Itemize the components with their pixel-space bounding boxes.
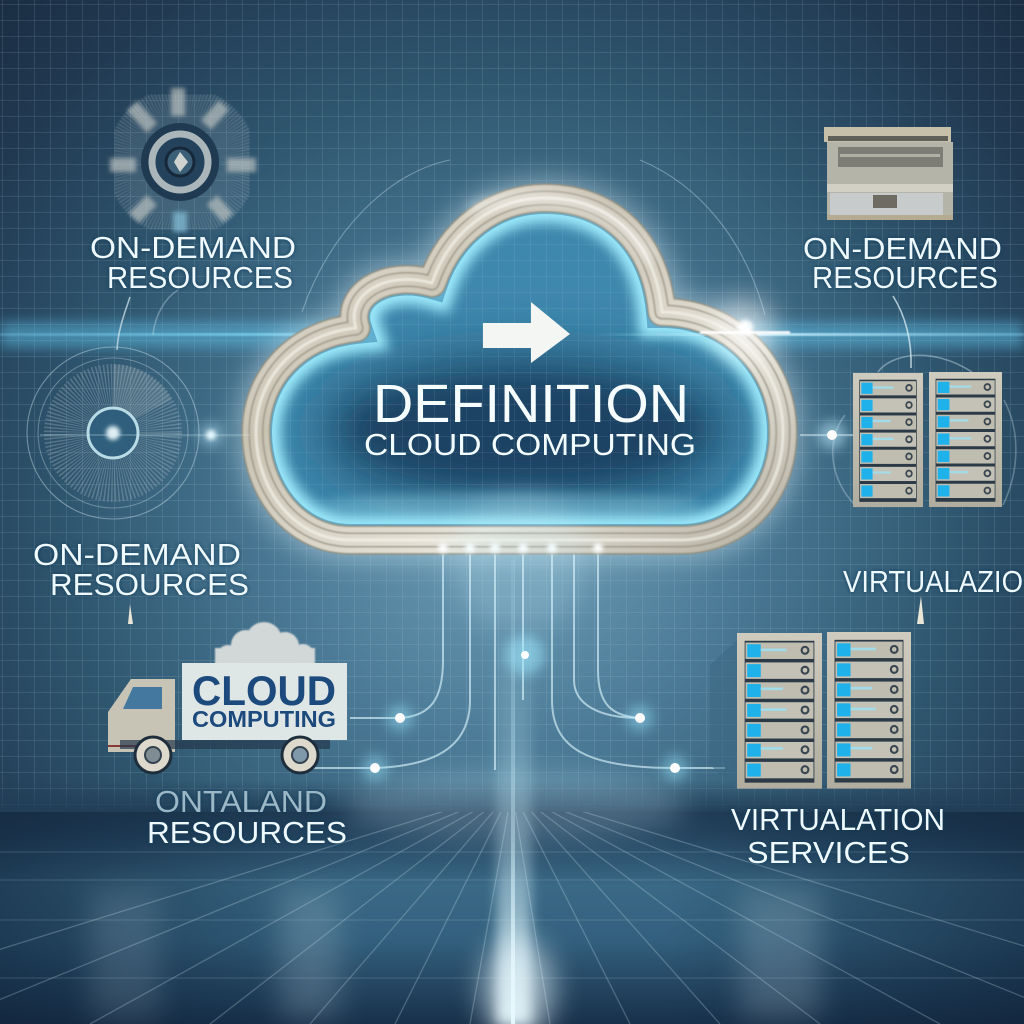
truck cloud puff	[215, 622, 315, 667]
label: virtualation services	[731, 802, 945, 870]
label: on-demand resources mid left: RESOURCES	[50, 567, 249, 602]
icon: server racks upper right	[853, 372, 1002, 507]
label: virtualation services: SERVICES	[747, 835, 910, 870]
label: on-demand resources top left: RESOURCES	[107, 260, 293, 295]
label: on-demand resources top right: RESOURCES	[812, 260, 998, 295]
truck wheels	[135, 737, 171, 773]
central light beam and reflection	[346, 560, 686, 1024]
star flare on cloud	[700, 278, 790, 358]
label: on-demand resources top right	[803, 231, 1002, 295]
label: on-demand resources mid left	[33, 537, 249, 602]
cloud body	[256, 198, 783, 540]
truck cab	[108, 679, 175, 752]
label: on-demand resources top right: ON-DEMAND	[803, 231, 1002, 266]
cloud outer glow	[256, 198, 783, 540]
small connector tick	[128, 604, 133, 624]
icon: radial gear top left	[110, 88, 256, 232]
connectors from top-left label to disc	[117, 290, 178, 350]
label: virtualation services: VIRTUALATION	[731, 802, 945, 837]
floor with perspective grid	[0, 780, 1024, 1024]
icon: device top right	[824, 127, 953, 220]
small connector tick right	[917, 596, 924, 624]
glow nodes under cloud	[362, 492, 688, 781]
silver rope outline	[256, 198, 783, 540]
label: on-demand resources mid left: ON-DEMAND	[33, 537, 241, 572]
label: ontal and resources	[147, 784, 347, 850]
arrow icon	[483, 302, 570, 363]
cloud	[240, 180, 810, 560]
icon: cloud truck	[108, 622, 347, 773]
label: ontal and resources: RESOURCES	[147, 815, 347, 850]
truck box	[182, 663, 347, 740]
icon: server racks lower right	[710, 632, 911, 789]
icon: cloud truck: COMPUTING	[192, 706, 336, 732]
icon: concentric disc left	[27, 347, 250, 519]
truck box text: CLOUD	[192, 667, 336, 714]
cloud inner detail	[270, 212, 769, 526]
label: on-demand resources top left: ON-DEMAND	[90, 230, 296, 265]
connector top right	[800, 296, 1016, 505]
label: on-demand resources top left	[90, 230, 296, 295]
connector wires below cloud	[300, 548, 725, 770]
subheading: cloud computing: CLOUD COMPUTING	[364, 427, 696, 462]
label: ontal and resources: ONTALAND	[155, 784, 327, 819]
horizontal light flare	[0, 322, 1024, 348]
rope highlight	[470, 198, 650, 260]
glow node right	[818, 421, 846, 449]
thin arcs behind cloud	[302, 160, 765, 315]
heading: definition: DEFINITION	[373, 374, 689, 434]
